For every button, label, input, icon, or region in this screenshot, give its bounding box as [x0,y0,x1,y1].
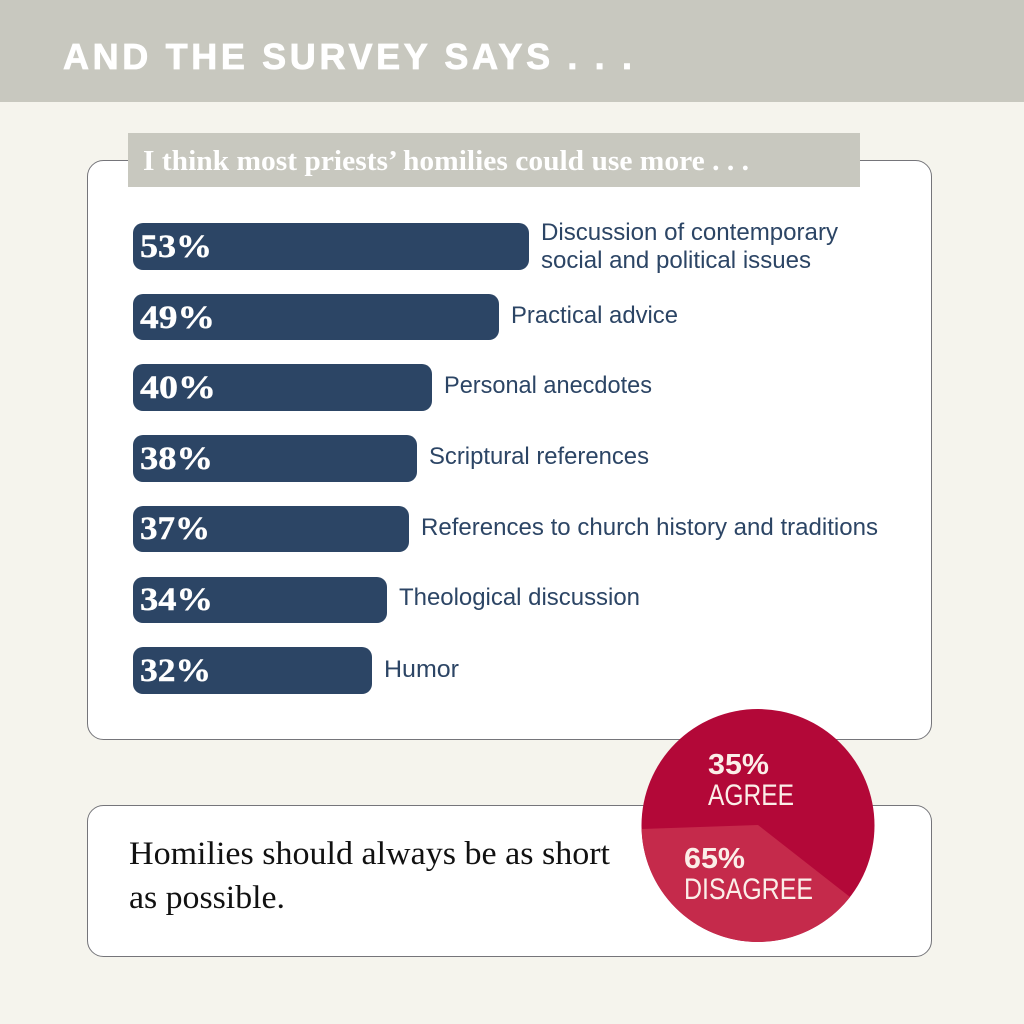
bar: 32% humor: 32% [140,653,211,689]
bar: 40% personal anecdotes [133,364,652,411]
panel heading: I think most priests’ homilies could use more . . . [143,146,749,177]
label: 35% agree [708,749,794,812]
bar: 53% discussion of contemporary issues [133,219,838,274]
slice: disagree [642,825,850,942]
bar: 32% humor: Humor [384,656,459,683]
bar: 37% church history and traditions [133,506,878,552]
bar: 38% scriptural references [133,435,649,482]
bar: 53% discussion of contemporary issues: social and political issues [541,247,811,274]
bar: 32% humor [133,647,459,694]
title: AND THE SURVEY SAYS . . . [63,36,632,77]
label: 65% disagree: 65% [684,843,745,875]
bar: 34% theological discussion [133,577,640,623]
bar: 34% theological discussion: 34% [140,582,213,618]
bar: 49% practical advice: Practical advice [511,302,678,329]
panel: homily length statement [88,806,932,956]
statement text: Homilies should always be as short [129,836,610,872]
bar: 34% theological discussion: Theological discussion [399,584,640,611]
bar: 53% discussion of contemporary issues: Discussion of contemporary [541,219,838,246]
label: 35% agree: 35% [708,749,769,781]
bar: 37% church history and traditions: References to church history and traditions [421,514,878,541]
panel heading [128,133,860,187]
statement text [129,836,610,916]
label: 65% disagree: DISAGREE [684,873,813,906]
pie chart: agree vs disagree [642,709,874,942]
bar: 38% scriptural references: 38% [140,441,213,477]
bar: 38% scriptural references: Scriptural references [429,443,649,470]
bar: 53% discussion of contemporary issues: 53% [140,229,212,265]
label: 35% agree: AGREE [708,779,794,812]
bar: 37% church history and traditions: 37% [140,511,210,547]
bar: 49% practical advice [133,294,678,340]
statement text: as possible. [129,880,285,916]
panel: homily survey bar chart [88,133,932,740]
bar: 49% practical advice: 49% [140,300,215,336]
label: 65% disagree [684,843,813,906]
bar: 40% personal anecdotes: Personal anecdotes [444,372,652,399]
header band [0,0,1024,102]
bar: 40% personal anecdotes: 40% [140,370,216,406]
